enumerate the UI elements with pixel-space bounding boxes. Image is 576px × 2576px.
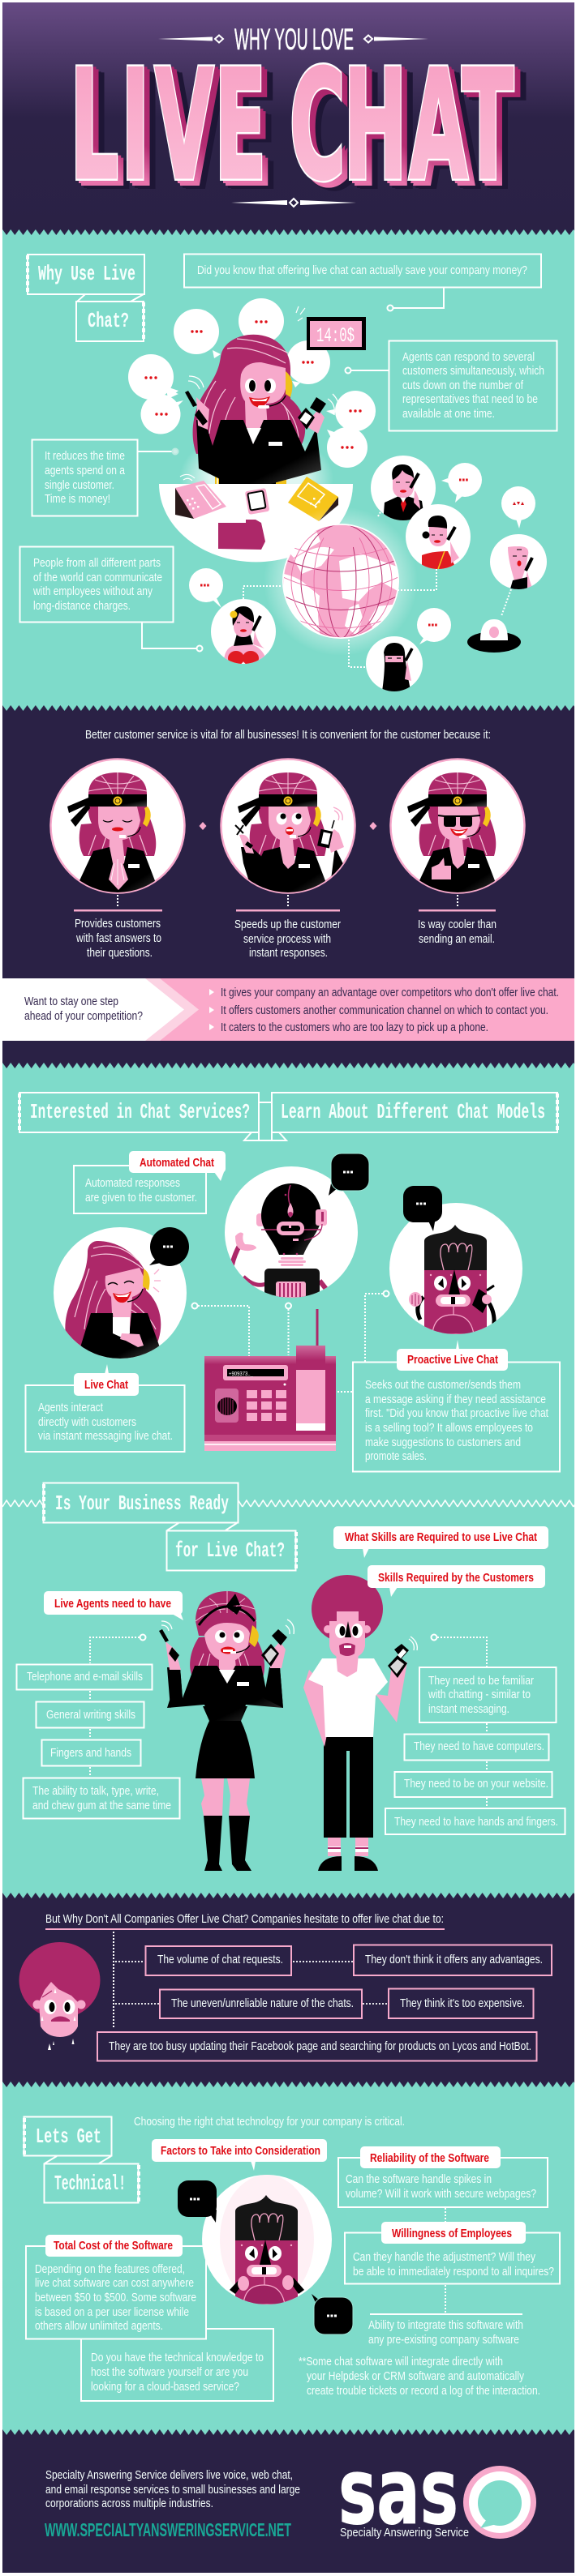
panel: footer [2,2429,574,2573]
callout: live chat: via instant messaging live chat. [38,1430,173,1443]
captions under portraits: Provides customers [75,918,161,931]
callout: reliability: volume? Will it work with secure webpages? [346,2188,536,2201]
callout: total cost: Total Cost of the Software [54,2240,173,2253]
captions under portraits: sending an email. [419,933,495,946]
logo: sas: Specialty Answering Service [340,2527,469,2540]
callout: simultaneous customers: available at one time. [402,408,495,421]
person: man with tie [371,456,436,523]
heading: live chat: LIVE CHAT [76,43,519,218]
connector: plus one [200,822,206,830]
callout: total cost: Depending on the features offered, [35,2263,185,2276]
ribbon heading: lets get technical: Technical! [54,2172,126,2196]
callout: reduces time [32,439,178,516]
list: agent skills: General writing skills [46,1709,135,1722]
ribbon heading: chat services and models [19,1093,557,1140]
label: skills required by customers: Skills Required by the Customers [378,1572,534,1585]
intro text: Choosing the right chat technology for your company is critical. [134,2116,405,2129]
captions under portraits: instant responses. [249,947,328,960]
heading: live chat: LIVE CHAT [81,46,525,221]
label: what skills: What Skills are Required to use Live Chat [345,1531,537,1544]
panel: why use live chat [2,229,574,708]
callout: reduces time: agents spend on a [45,464,126,477]
portrait: way cooler [391,759,524,898]
note: helpdesk integration: your Helpdesk or CRM software and automatically [307,2370,525,2383]
callout: automated chat [74,1151,226,1213]
illustration: fax phone [204,1309,336,1451]
header ornament: bottom [231,200,356,205]
callout: hosting: Do you have the technical knowledge to [91,2351,264,2364]
label: skills required by customers [368,1565,545,1597]
text: about: corporations across multiple industries. [45,2497,213,2510]
captions under portraits: service process with [243,933,331,946]
speech bubble: woman in burka [417,608,451,644]
list: customer skills: They need to be familiar [428,1675,534,1688]
person: man with pink head [490,534,547,592]
illustration: robot [225,1166,358,1298]
callout: proactive live chat [353,1340,560,1472]
illustration: worried face [19,1942,101,2050]
band: one step ahead: It caters to the customers who are too lazy to pick up a phone. [221,1021,488,1034]
callout: live chat: directly with customers [38,1416,136,1429]
callout: willingness [345,2222,560,2313]
list: agent skills: The ability to talk, type, write, [32,1785,159,1798]
portrait: speeds up service [221,759,355,898]
icon: clock display [296,306,366,350]
illustration: live chat agent [54,1227,187,1359]
list: customer skills: They need to be on your website. [404,1778,548,1791]
speech bubble: live chat [149,1227,189,1266]
callout: long-distance: with employees without any [32,585,153,598]
text: about: and email response services to small businesses and large [45,2484,300,2497]
callout: reliability: Can the software handle spikes in [346,2173,492,2186]
panel: customer service [2,705,574,1063]
callout: simultaneous customers: representatives that need to be [402,393,538,406]
box: uneven: The uneven/unreliable nature of the chats. [171,1997,354,2010]
text: integration: Ability to integrate this software with [368,2319,523,2332]
list: customer skills: with chatting - similar to [428,1688,531,1701]
callout: long-distance: People from all different parts [33,557,161,570]
illustration: fax phone: +909373.._ [229,1371,253,1377]
globe [264,507,418,656]
label: factors: Factors to Take into Consideration [161,2145,320,2158]
illustration: proactive robot [389,1203,522,1335]
list: customer skills: instant messaging. [428,1703,509,1716]
dotted connectors [114,1932,388,2029]
portrait: fast answers [50,759,185,898]
callout: proactive live chat: Proactive Live Chat [407,1354,498,1367]
callout: reduces time: It reduces the time [45,450,125,463]
band: one step ahead: Want to stay one step [24,995,118,1008]
callout: hosting: host the software yourself or are you [91,2366,248,2379]
captions under portraits: their questions. [87,947,153,960]
captions under portraits: Is way cooler than [418,918,496,931]
section heading: But Why Don't All Companies Offer Live Chat? Companies hesitate to offer live chat due to: [45,1913,444,1926]
dotted connectors to globe [243,496,511,667]
panel: why companies hesitate [2,1893,574,2087]
ribbon heading: is your business ready: for Live Chat? [175,1538,285,1563]
callout: simultaneous customers: cuts down on the number of [402,379,524,392]
connector: plus two [370,822,376,830]
website link: WWW.SPECIALTYANSWERINGSERVICE.NET [45,2519,291,2540]
ribbon heading: why use live chat [28,255,144,341]
list: agent skills: Fingers and hands [50,1747,131,1760]
list: customer skills [385,1634,565,1834]
person: woman in burka [366,636,423,697]
label: live agents need [44,1591,183,1620]
text: integration [368,2313,523,2347]
callout: hosting: looking for a cloud-based service? [91,2381,239,2394]
box: volume: The volume of chat requests. [157,1953,283,1966]
list: agent skills [16,1634,180,1819]
ribbon heading: lets get technical: Lets Get [36,2125,101,2149]
illustration: technical robot [202,2175,332,2305]
speech bubbles around agent [128,298,376,468]
label: live agents need: Live Agents need to have [54,1598,171,1611]
callout: hosting [81,2329,273,2401]
icon: clock display: 14:0$ [316,324,355,348]
header ornament: top right [374,37,428,41]
label: what skills [333,1526,548,1558]
list: agent skills: and chew gum at the same time [32,1799,171,1812]
list: agent skills: Telephone and e-mail skills [27,1671,143,1684]
captions under portraits: Speeds up the customer [234,918,341,931]
speech bubble: technical lower [312,2294,353,2334]
callout: live chat: Live Chat [84,1379,128,1392]
zigzag divider [2,1500,574,1508]
note: helpdesk integration [299,2356,540,2398]
heading: live chat: LIVE CHAT [70,38,514,213]
list: customer skills: They need to have computers. [414,1740,544,1753]
callout: simultaneous customers [346,340,557,431]
callout: live chat: Agents interact [38,1401,103,1414]
callout: live chat [26,1364,185,1452]
heading: live chat: LIVE CHAT [73,41,517,216]
callout: reduces time: Time is money! [45,493,110,506]
header ornament: top left [158,37,213,41]
callout: proactive live chat: is a selling tool? It allows employees to [365,1422,533,1435]
text: about [45,2469,300,2510]
box: too busy [97,2032,537,2060]
callout: willingness: Willingness of Employees [392,2227,512,2240]
speech bubble: woman with flower [189,568,223,608]
callout: long-distance: long-distance charges. [33,600,131,613]
intro text: Better customer service is vital for all businesses! It is convenient for the customer because it: [85,729,491,742]
band: one step ahead: ahead of your competition? [24,1010,143,1023]
callout: total cost [26,2235,206,2339]
callout: reliability: Reliability of the Software [370,2152,489,2165]
dotted connectors to fax [191,1290,389,1392]
box: volume [146,1946,291,1975]
note: helpdesk integration: **Some chat software will integrate directly with [299,2356,503,2368]
text: about: Specialty Answering Service delivers live voice, web chat, [45,2469,293,2482]
callout: reliability [338,2146,548,2222]
speech bubble: proactive [403,1186,442,1231]
callout: automated chat: Automated responses [85,1177,180,1190]
illustration: call centre agent [179,335,339,527]
panel: lets get technical [2,2082,574,2435]
ribbon heading: is your business ready [43,1483,296,1571]
illustration: desk with phones [159,474,353,562]
callout: proactive live chat: make suggestions to customers and [365,1436,521,1449]
speech bubble: technical upper [178,2180,217,2223]
callout: long-distance [19,546,203,652]
callout: total cost: is based on a per user license while [35,2306,189,2319]
callout: simultaneous customers: customers simultaneously, which [402,365,544,378]
callout: automated chat: Automated Chat [140,1157,214,1170]
ribbon heading: why use live chat: Chat? [88,309,129,333]
callout: simultaneous customers: Agents can respond to several [402,351,535,364]
text: integration: any pre-existing company software [368,2334,519,2347]
callout: willingness: Can they handle the adjustment? Will they [353,2251,536,2264]
box: expensive: They think it's too expensive. [400,1997,525,2010]
icon: hat [467,619,521,653]
speech bubble: man [441,463,482,503]
callout: proactive live chat: Seeks out the customer/sends them [365,1379,521,1392]
callout: long-distance: of the world can communicate [33,571,162,584]
illustration: female agent [159,1591,294,1871]
callout: total cost: others allow unlimited agents. [35,2320,163,2333]
speech bubble: robot [329,1153,369,1196]
speech bubble: triangles [501,486,535,528]
box: uneven [160,1989,362,2018]
logo: sas: sas [338,2440,458,2545]
box: expensive [389,1989,534,2018]
heading: why you love: WHY YOU LOVE [234,23,354,56]
callout: total cost: between $50 to $500. Some software [35,2291,196,2304]
person: woman with flower [211,599,276,665]
band: one step ahead [2,978,574,1041]
ribbon heading: lets get technical [24,2117,139,2203]
panel: title header [2,2,574,233]
box: no advantages: They don't think it offers any advantages. [365,1953,543,1966]
callout: proactive live chat: promote sales. [365,1450,427,1463]
callout: automated chat: are given to the customer. [85,1192,197,1205]
box: no advantages [354,1945,552,1975]
person: woman in red [406,504,471,571]
callout: reduces time: single customer. [45,479,114,492]
captions under portraits: with fast answers to [75,932,161,945]
heading: live chat: LIVE CHAT [78,45,522,220]
callout: save money [184,255,541,311]
callout: total cost: live chat software can cost anywhere [35,2277,194,2290]
panel: chat models [2,1063,574,1898]
ribbon heading: chat services and models: Interested in Chat Services? [30,1100,250,1124]
ribbon heading: why use live chat: Why Use Live [38,262,135,286]
heading: live chat: LIVE CHAT [70,38,514,213]
ribbon heading: is your business ready: Is Your Business Ready [55,1491,229,1516]
label: factors [152,2139,327,2171]
captions under portraits [74,895,496,960]
illustration: man with afro [303,1575,417,1871]
